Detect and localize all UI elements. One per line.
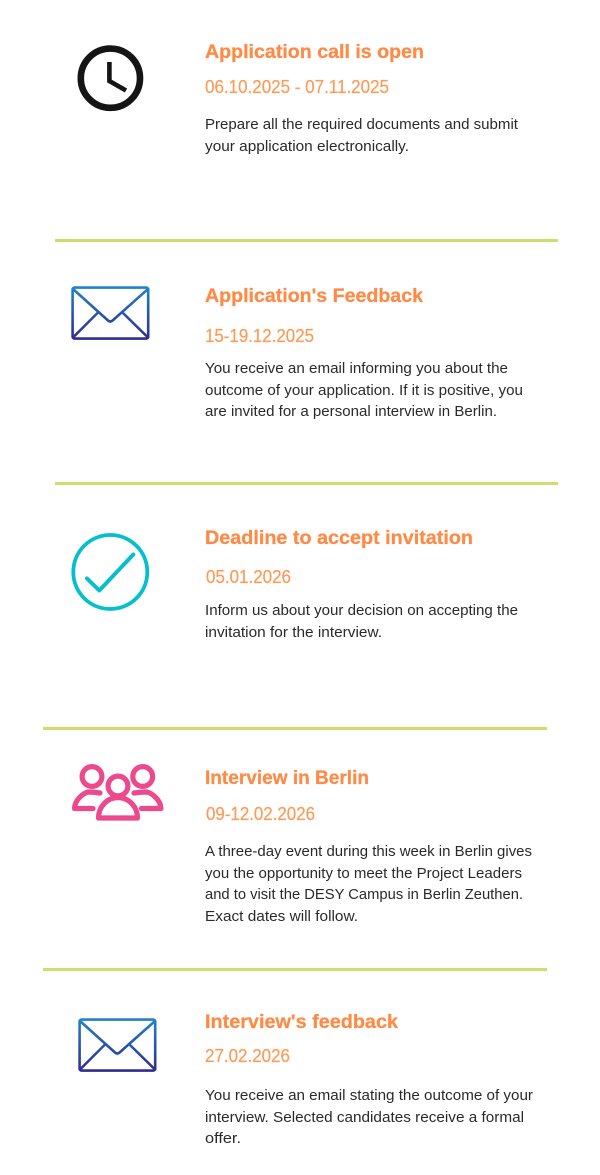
step 1 text: [205, 41, 518, 155]
body: interview feedback: [205, 1088, 533, 1147]
body: application call: your application electronically.: [205, 139, 409, 155]
body: application call: Prepare all the required documents and submit: [205, 117, 518, 133]
body: interview: Exact dates will follow.: [205, 909, 358, 925]
date: interview: 09-12.02.2026: [206, 804, 315, 824]
body: interview: and to visit the DESY Campus in Berlin Zeuthen.: [205, 887, 523, 903]
date: interview feedback: 27.02.2026: [205, 1046, 290, 1066]
step 2 text: [205, 285, 523, 420]
body: application feedback: are invited for a personal interview in Berlin.: [205, 404, 497, 420]
body: application call: [205, 117, 518, 155]
body: interview feedback: offer.: [205, 1131, 241, 1147]
body: interview feedback: interview. Selected candidates receive a formal: [205, 1110, 524, 1126]
body: interview: you the opportunity to meet the Project Leaders: [205, 866, 522, 882]
body: application feedback: You receive an email informing you about the: [205, 361, 508, 377]
date: deadline: 05.01.2026: [206, 567, 291, 587]
body: deadline: Inform us about your decision on accepting the: [205, 603, 518, 619]
body: interview feedback: You receive an email stating the outcome of your: [205, 1088, 533, 1104]
date: application call: 06.10.2025 - 07.11.2025: [205, 77, 389, 97]
body: interview: [205, 844, 532, 925]
icon: clock: [81, 49, 140, 108]
step 3 text: [205, 527, 518, 641]
step 4 text: [205, 767, 532, 925]
body: interview: A three-day event during this week in Berlin gives: [205, 844, 532, 860]
icon: group of people: [74, 767, 161, 818]
heading: application feedback: Application's Feedback: [205, 285, 423, 307]
step 5 text: [205, 1011, 533, 1147]
date: application feedback: 15-19.12.2025: [205, 326, 314, 346]
icon: envelope: [80, 1020, 155, 1071]
icon: check mark: [73, 535, 147, 609]
heading: interview feedback: Interview's feedback: [205, 1011, 398, 1033]
icon: envelope: [73, 288, 148, 339]
body: application feedback: outcome of your application. If it is positive, you: [205, 383, 523, 399]
body: deadline: [205, 603, 518, 641]
body: deadline: invitation for the interview.: [205, 625, 382, 641]
heading: interview: Interview in Berlin: [205, 767, 369, 789]
heading: application call: Application call is open: [205, 41, 424, 63]
body: application feedback: [205, 361, 523, 420]
heading: deadline: Deadline to accept invitation: [205, 527, 473, 549]
